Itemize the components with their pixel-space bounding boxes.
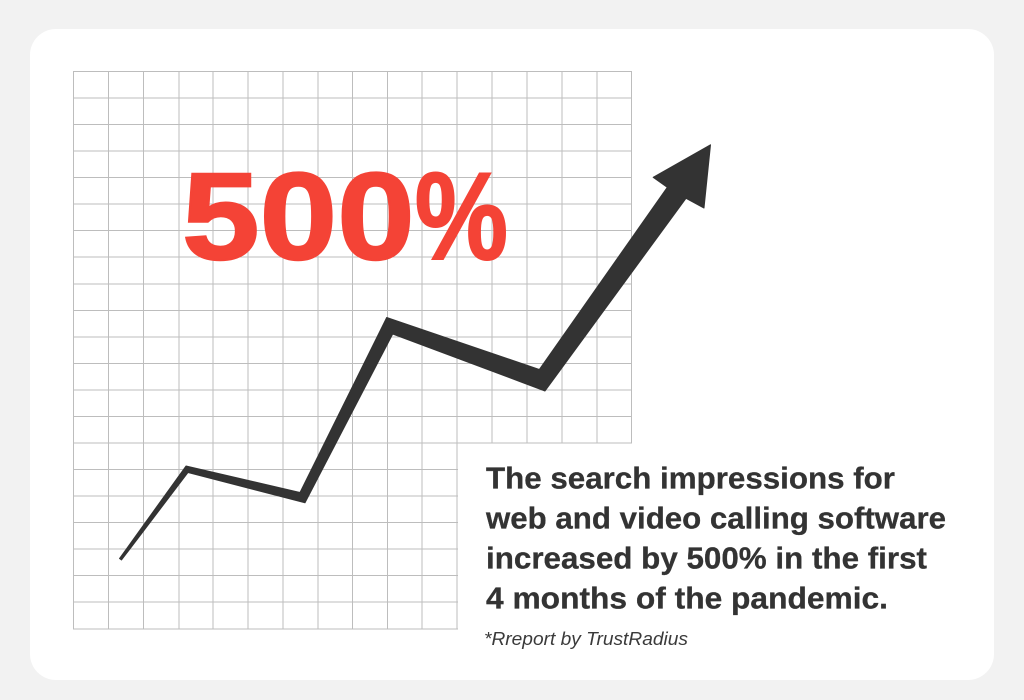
text block: description: web and video calling software (485, 500, 946, 536)
chart grid (73, 72, 632, 629)
headline: 500%: % (415, 148, 508, 286)
source note: *Rreport by TrustRadius (484, 628, 688, 649)
text block: description (485, 460, 946, 616)
text block: description: The search impressions for (486, 460, 895, 496)
headline: 500%: 500 (182, 148, 415, 286)
text block: description: 4 months of the pandemic. (486, 580, 888, 616)
text block: description: increased by 500% in the first (486, 540, 927, 576)
arrow: rising trend line (120, 145, 710, 560)
